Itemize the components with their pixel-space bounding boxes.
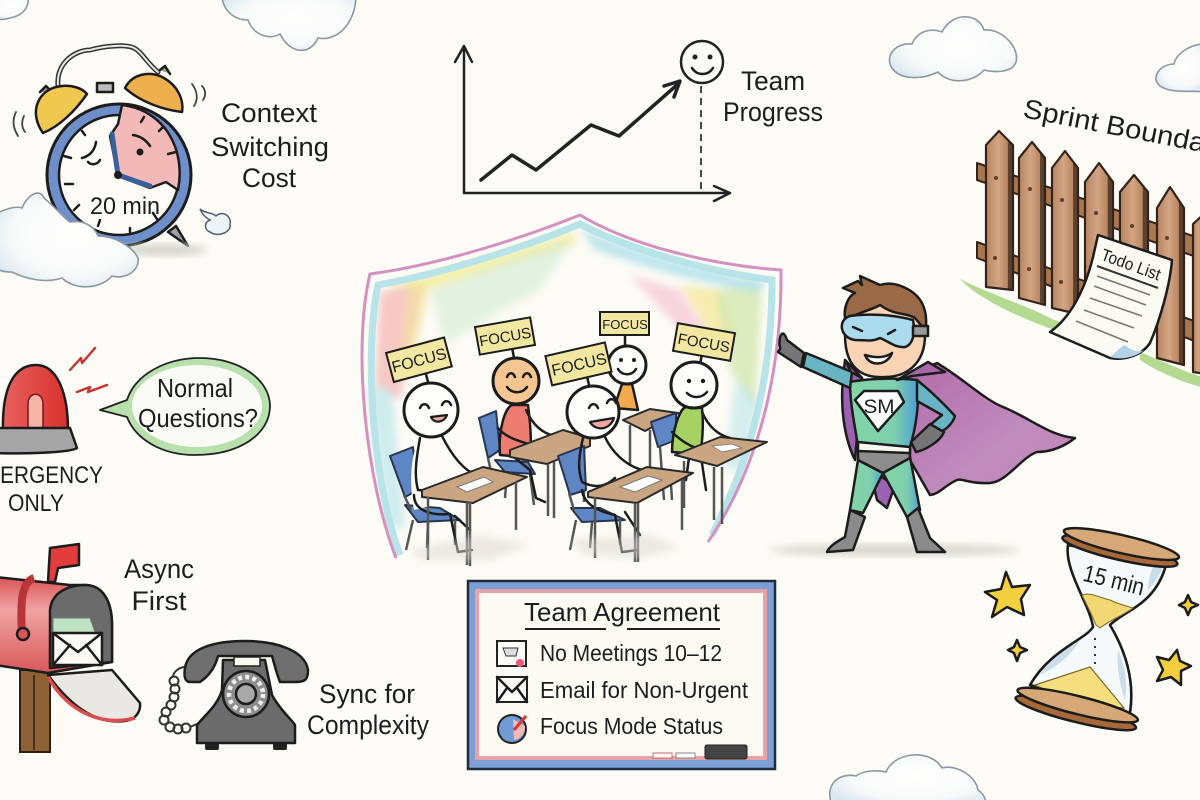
rainbow shield xyxy=(362,215,781,558)
mailbox strap xyxy=(21,578,34,634)
front centre chair xyxy=(558,446,586,495)
hero smile xyxy=(865,353,892,363)
red student sign: FOCUS xyxy=(478,325,533,350)
phone dial xyxy=(223,671,269,717)
hero torso xyxy=(850,379,918,447)
student: front left xyxy=(386,337,527,566)
clock label: 20 min xyxy=(90,193,160,220)
hero chest emblem xyxy=(855,391,904,431)
red student body xyxy=(500,405,531,458)
siren base xyxy=(0,428,77,453)
front left body xyxy=(411,436,455,510)
clock body ring xyxy=(47,104,191,246)
hero hair xyxy=(843,276,926,330)
mailbox: async first xyxy=(0,544,140,752)
cloud: far right xyxy=(1156,44,1200,92)
red student head xyxy=(493,358,539,404)
board surface xyxy=(477,591,765,758)
hourglass glass xyxy=(1030,545,1166,713)
label: context switching cost: Cost xyxy=(242,163,296,193)
label: context switching cost: Switching xyxy=(211,132,329,162)
hero glove on hip xyxy=(911,424,944,452)
fence nails xyxy=(993,176,1169,284)
front centre desk xyxy=(588,467,693,503)
fence grass xyxy=(960,279,1200,388)
hourglass blue shading xyxy=(1040,560,1162,700)
green student body xyxy=(672,407,703,454)
green student sign: FOCUS xyxy=(676,331,731,356)
siren: emergency only xyxy=(0,348,107,453)
front left chair xyxy=(390,447,418,497)
hourglass: 15 minutes xyxy=(985,522,1198,737)
star right xyxy=(1157,650,1191,685)
smoke puff xyxy=(200,209,230,234)
hourglass lower sand xyxy=(1035,667,1124,708)
clock top button xyxy=(97,83,113,92)
orange student body xyxy=(614,384,638,410)
orange student head xyxy=(608,346,646,384)
shield outlines xyxy=(371,224,772,555)
green student head xyxy=(671,362,717,408)
clock bell knobs xyxy=(40,66,170,92)
fence rails xyxy=(977,163,1200,345)
siren highlight xyxy=(28,394,43,430)
green student sign xyxy=(671,323,735,373)
board frame xyxy=(468,581,775,769)
chart: team progress xyxy=(455,41,730,201)
floor shadow under students xyxy=(410,535,680,560)
star small left xyxy=(1008,640,1027,661)
label: team progress xyxy=(723,66,823,127)
hero cape xyxy=(897,363,1075,495)
board row: focus mode: Focus Mode Status xyxy=(540,713,723,739)
cloud: top right xyxy=(889,17,1017,81)
clock bell right xyxy=(125,74,182,112)
label: async first: First xyxy=(132,586,187,616)
label: emergency only xyxy=(0,462,103,517)
board marker tray xyxy=(653,745,747,759)
cloud: beneath clock xyxy=(0,193,138,287)
speech bubble: normal questions xyxy=(100,358,270,455)
hero face xyxy=(845,300,925,377)
orange student sign: FOCUS xyxy=(602,317,648,332)
board heading: Team Agreement xyxy=(524,597,721,627)
hourglass upper sand xyxy=(1082,594,1133,628)
fence pickets xyxy=(986,131,1200,374)
label: async first xyxy=(124,554,194,616)
speech bubble: normal questions: Normal xyxy=(157,373,233,403)
label: team progress: Team xyxy=(741,66,805,96)
red student sign xyxy=(475,317,537,366)
orange student sign xyxy=(600,312,649,347)
speech bubble: normal questions: Questions? xyxy=(138,403,258,433)
clock: context switching cost xyxy=(14,46,230,256)
green student desk xyxy=(675,437,767,466)
front centre head xyxy=(567,386,619,438)
green student chair xyxy=(651,413,676,447)
chart smiley xyxy=(681,41,723,83)
clock face left: tired xyxy=(82,142,100,164)
fence: sprint boundaries xyxy=(960,131,1200,388)
mailbox flag xyxy=(48,544,79,582)
mailbox opening xyxy=(50,585,112,668)
label: sync for complexity xyxy=(307,679,429,740)
phone base xyxy=(197,660,295,743)
hero angry eyebrows xyxy=(853,327,895,334)
hourglass bottom cap xyxy=(1013,681,1140,737)
front left sign xyxy=(386,337,456,396)
label: context switching cost: Context xyxy=(221,98,318,128)
cloud: top centre xyxy=(222,0,356,50)
front left sign: FOCUS xyxy=(390,346,449,377)
hourglass label: 15 min xyxy=(1080,560,1147,601)
board row: email: Email for Non-Urgent xyxy=(540,677,749,703)
hero belt and briefs xyxy=(858,444,910,473)
hero ground shadow xyxy=(770,544,1020,556)
hero left leg xyxy=(850,460,883,513)
todo list paper: Todo List xyxy=(1099,245,1163,284)
whiteboard: team agreement xyxy=(468,581,775,769)
front left head xyxy=(404,383,458,437)
chart axes xyxy=(455,46,730,201)
mailbox papers xyxy=(53,618,95,640)
student: front centre xyxy=(545,342,693,562)
hero right leg xyxy=(883,457,920,517)
mailbox body xyxy=(0,577,112,673)
label: team progress: Progress xyxy=(723,97,823,127)
front centre sign: FOCUS xyxy=(550,351,609,380)
hero boots xyxy=(827,510,865,552)
label: async first: Async xyxy=(124,554,194,584)
siren dome xyxy=(3,365,68,430)
board row: focus mode xyxy=(498,713,723,743)
student: back orange xyxy=(600,312,678,470)
mailbox door xyxy=(48,670,140,721)
clock hands xyxy=(112,134,150,186)
front centre body xyxy=(579,437,642,552)
student: red xyxy=(475,317,590,518)
hero collar xyxy=(845,360,945,380)
hero arm on hip xyxy=(917,380,955,432)
clock face xyxy=(59,115,179,235)
mailbox envelope xyxy=(53,633,102,665)
red student chair xyxy=(479,411,500,458)
phone feet xyxy=(205,743,219,750)
hero goggles xyxy=(842,315,914,347)
orange student desk xyxy=(623,409,678,431)
student: green xyxy=(651,323,767,524)
label: context switching cost xyxy=(211,98,329,193)
hero glove raised xyxy=(778,334,804,367)
clock face right: pained xyxy=(133,135,150,146)
clock legs xyxy=(168,226,188,246)
cloud: bottom right xyxy=(830,755,986,800)
front left desk xyxy=(422,467,527,503)
label: emergency only: ONLY xyxy=(8,490,64,517)
superhero: scrum master xyxy=(770,276,1075,556)
board row: no meetings: No Meetings 10–12 xyxy=(540,640,722,666)
phone cord xyxy=(160,667,197,734)
clock handle xyxy=(58,46,158,86)
phone handset xyxy=(185,641,308,682)
clock bell left xyxy=(36,86,87,133)
red student desk xyxy=(510,430,590,464)
mailbox post xyxy=(20,670,50,752)
star small right xyxy=(1179,595,1198,615)
chart dashed marker xyxy=(700,86,702,190)
shield interior tints xyxy=(367,228,765,530)
telephone: sync for complexity xyxy=(160,641,308,750)
clock shadow xyxy=(123,244,207,256)
label: sync for complexity: Complexity xyxy=(307,710,429,740)
cloud: top left corner xyxy=(0,0,28,20)
hero raised arm xyxy=(803,353,852,388)
chart rising line xyxy=(481,81,680,180)
star large left xyxy=(985,572,1030,617)
hero chest emblem: SM xyxy=(864,397,894,418)
label: sync for complexity: Sync for xyxy=(319,679,415,709)
todo list paper xyxy=(1050,235,1172,359)
clock tick marks xyxy=(64,117,176,232)
siren flashes xyxy=(70,348,107,392)
clock motion lines xyxy=(14,84,205,136)
hourglass falling grains xyxy=(1094,638,1096,664)
front centre sign xyxy=(545,342,614,396)
hourglass top cap xyxy=(1060,522,1181,573)
clock cracked pink wedge xyxy=(110,105,180,190)
